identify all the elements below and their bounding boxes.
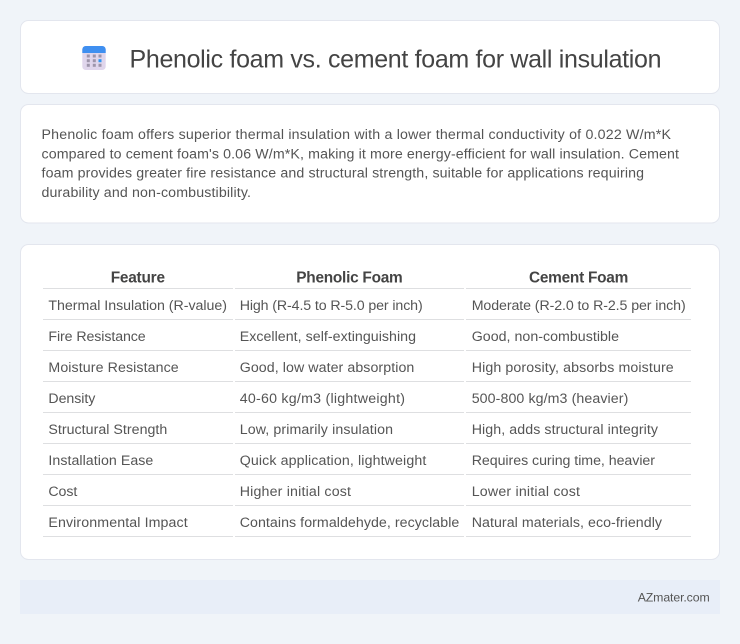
row: cost: Cost	[48, 484, 77, 500]
panel: comparison table	[20, 244, 720, 560]
row: installation ease: Requires curing time, heavier	[472, 453, 655, 469]
icon: calendar grid	[82, 46, 106, 70]
row: structural strength	[48, 422, 659, 438]
title: Phenolic foam vs. cement foam for wall insulation	[130, 46, 662, 74]
row: thermal insulation: High (R-4.5 to R-5.0 per inch)	[240, 298, 423, 314]
table header row: Feature	[111, 270, 165, 287]
row: fire resistance: Good, non-combustible	[472, 329, 619, 345]
row: installation ease: Installation Ease	[48, 453, 153, 469]
row: structural strength: Structural Strength	[48, 422, 167, 438]
row: environmental impact: Contains formaldehyde, recyclable	[240, 515, 459, 531]
panel: title header	[20, 20, 720, 94]
table header row	[111, 270, 628, 287]
row: environmental impact: Environmental Impact	[48, 515, 188, 531]
summary text: compared to cement foam's 0.06 W/m*K, making it more energy-efficient for wall insulation. Cement	[42, 146, 679, 162]
row: structural strength: Low, primarily insulation	[240, 422, 393, 438]
row: fire resistance: Fire Resistance	[48, 329, 146, 345]
panel: summary	[20, 104, 720, 223]
row: density: Density	[48, 391, 96, 407]
row: environmental impact	[48, 515, 663, 531]
row: cost	[48, 484, 580, 500]
footer bar	[20, 580, 720, 614]
row: environmental impact: Natural materials, eco-friendly	[472, 515, 663, 531]
summary text: foam provides greater fire resistance and structural strength, suitable for applications requiring	[42, 166, 644, 182]
row: fire resistance	[48, 329, 619, 345]
summary text: durability and non-combustibility.	[42, 185, 251, 201]
row: moisture resistance: Good, low water absorption	[240, 360, 414, 376]
row: installation ease: Quick application, lightweight	[240, 453, 426, 469]
row: density	[48, 391, 628, 407]
row: thermal insulation: Thermal Insulation (R-value)	[48, 298, 227, 314]
summary text: Phenolic foam offers superior thermal insulation with a lower thermal conductivity of 0.022 W/m*K	[42, 127, 672, 143]
table header row: Cement Foam	[529, 270, 628, 287]
table header row: Phenolic Foam	[296, 270, 403, 287]
row: density: 40-60 kg/m3 (lightweight)	[240, 391, 405, 407]
row: moisture resistance	[48, 360, 674, 376]
row: density: 500-800 kg/m3 (heavier)	[472, 391, 628, 407]
row: fire resistance: Excellent, self-extinguishing	[240, 329, 416, 345]
footer credit: AZmater.com	[638, 590, 710, 604]
row: thermal insulation	[48, 298, 686, 314]
summary text	[42, 127, 679, 201]
row: structural strength: High, adds structural integrity	[472, 422, 659, 438]
row: thermal insulation: Moderate (R-2.0 to R-2.5 per inch)	[472, 298, 686, 314]
row: cost: Higher initial cost	[240, 484, 351, 500]
row: installation ease	[48, 453, 655, 469]
row: moisture resistance: Moisture Resistance	[48, 360, 179, 376]
row: cost: Lower initial cost	[472, 484, 580, 500]
row: moisture resistance: High porosity, absorbs moisture	[472, 360, 674, 376]
